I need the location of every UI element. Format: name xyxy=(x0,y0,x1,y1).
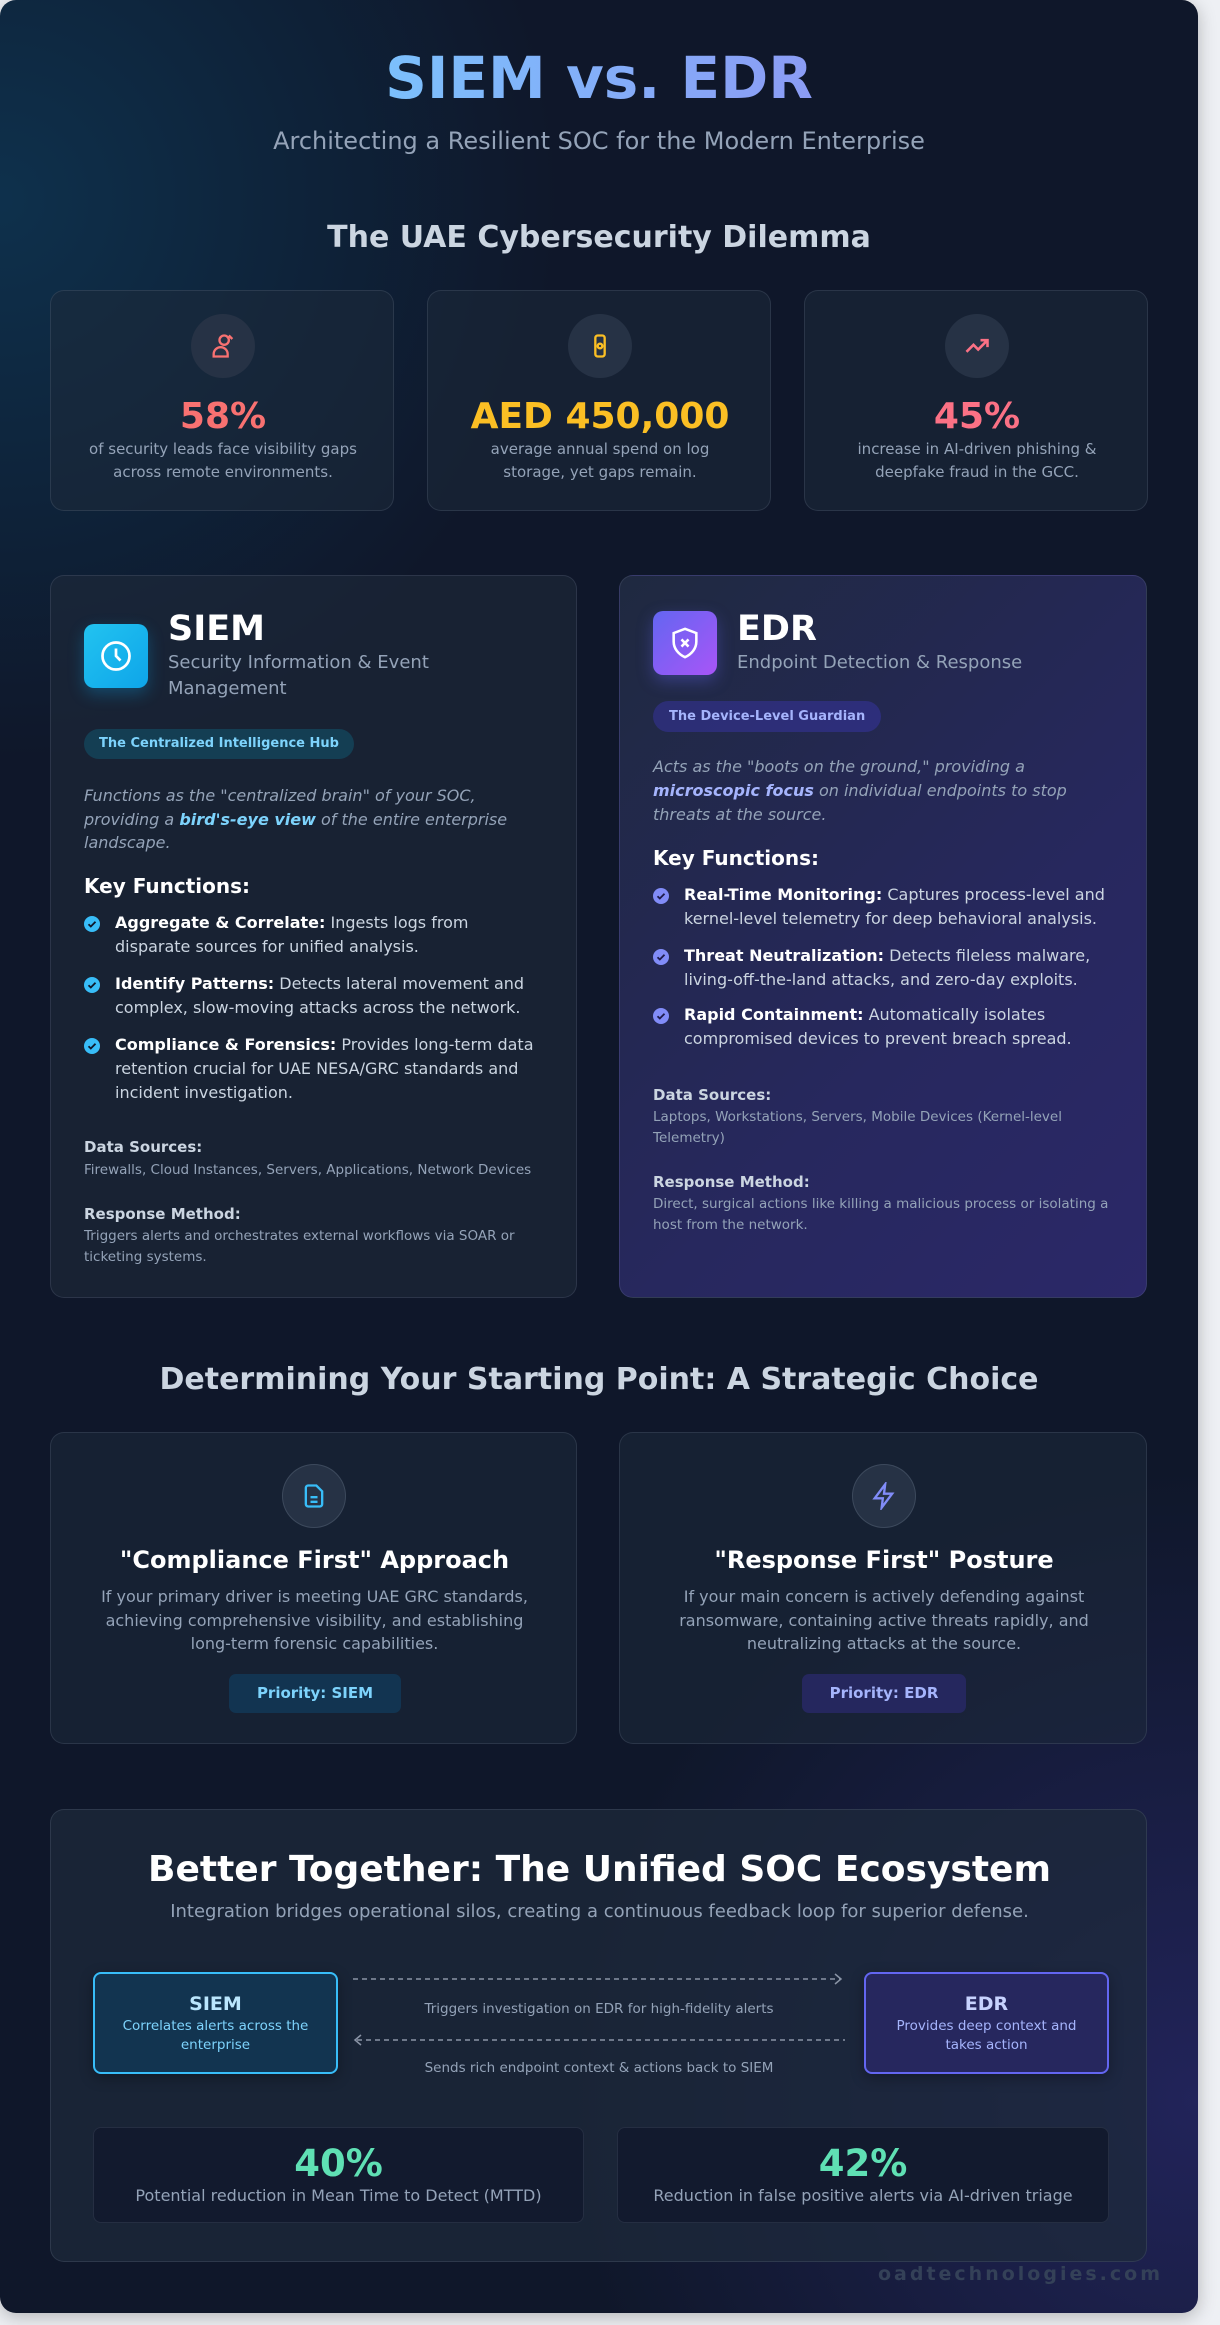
priority badge xyxy=(802,1674,966,1713)
choice text: If your main concern is actively defending against ransomware, containing active threats rapidly, and neutralizing attacks at the source. xyxy=(679,1587,1089,1653)
bullet 1: Real-Time Monitoring: Captures process-level and kernel-level telemetry for deep behavioral analysis. xyxy=(684,885,1105,928)
data sources xyxy=(652,1086,1062,1146)
metric: false positives: 42% xyxy=(819,2142,907,2185)
pill xyxy=(84,729,354,759)
choice card: compliance first xyxy=(50,1432,577,1744)
bullet 3: Compliance & Forensics: Provides long-term data retention crucial for UAE NESA/GRC standards and incident investigation. xyxy=(115,1035,534,1102)
stat card: 45% xyxy=(804,290,1148,511)
EDR subtitle: Endpoint Detection & Response xyxy=(737,652,1022,673)
data sources: Data Sources: xyxy=(84,1138,202,1156)
data sources xyxy=(84,1138,531,1178)
stat card: 58% xyxy=(50,290,394,511)
bullet 3: Rapid Containment: Automatically isolates compromised devices to prevent breach spread. xyxy=(684,1005,1072,1048)
stat number: 58% xyxy=(180,396,266,437)
data sources: Firewalls, Cloud Instances, Servers, Applications, Network Devices xyxy=(84,1162,531,1178)
stat number: 45% xyxy=(934,396,1020,437)
response method: Response Method: xyxy=(653,1173,810,1191)
panel: better together xyxy=(50,1809,1147,2262)
response method: Triggers alerts and orchestrates external workflows via SOAR or ticketing systems. xyxy=(84,1228,515,1265)
node: EDR: EDR xyxy=(965,1993,1008,2015)
node: EDR: Provides deep context and takes action xyxy=(896,2018,1076,2053)
stat text: average annual spend on log storage, yet gaps remain. xyxy=(491,440,709,481)
arrow label 2: Sends rich endpoint context & actions back to SIEM xyxy=(425,2060,773,2076)
footer watermark: oadtechnologies.com xyxy=(878,2263,1163,2285)
heading: strategic choice: Determining Your Starting Point: A Strategic Choice xyxy=(160,1362,1038,1397)
bullet 1: Aggregate & Correlate: Ingests logs from disparate sources for unified analysis. xyxy=(115,913,468,956)
stat number: AED 450,000 xyxy=(471,396,729,437)
node: EDR xyxy=(864,1972,1109,2074)
stat text: increase in AI-driven phishing & deepfake fraud in the GCC. xyxy=(858,440,1096,481)
pill: The Centralized Intelligence Hub xyxy=(99,736,339,751)
arrow: EDR to SIEM xyxy=(354,2034,845,2046)
SIEM title: SIEM xyxy=(168,609,265,649)
arrow label 1: Triggers investigation on EDR for high-fidelity alerts xyxy=(424,2001,774,2017)
icon: trend xyxy=(945,314,1009,378)
icon: bolt xyxy=(852,1464,916,1528)
data sources: Laptops, Workstations, Servers, Mobile Devices (Kernel-level Telemetry) xyxy=(653,1109,1062,1146)
arrow: SIEM to EDR xyxy=(353,1974,842,1984)
bullet 2: Threat Neutralization: Detects fileless malware, living-off-the-land attacks, and zero-day exploits. xyxy=(684,946,1090,989)
heading: dilemma: The UAE Cybersecurity Dilemma xyxy=(327,220,871,255)
icon: coins xyxy=(568,314,632,378)
EDR title: EDR xyxy=(737,609,817,649)
priority badge: Priority: EDR xyxy=(830,1684,938,1702)
response method: Response Method: xyxy=(84,1205,241,1223)
priority badge xyxy=(229,1674,401,1713)
pill xyxy=(653,701,881,732)
choice title: "Response First" Posture xyxy=(714,1546,1054,1574)
choice card: response first xyxy=(619,1432,1147,1744)
data sources: Data Sources: xyxy=(653,1086,771,1104)
stat text: of security leads face visibility gaps across remote environments. xyxy=(89,440,357,481)
choice text: If your primary driver is meeting UAE GRC standards, achieving comprehensive visibility, and establishing long-term forensic capabilities. xyxy=(101,1587,528,1653)
subtitle: Architecting a Resilient SOC for the Modern Enterprise xyxy=(273,127,925,155)
node: SIEM: SIEM xyxy=(189,1993,242,2015)
ecosystem title: Better Together: The Unified SOC Ecosystem xyxy=(148,1849,1051,1890)
metric: false positives xyxy=(617,2127,1109,2223)
title: SIEM vs. EDR xyxy=(385,44,813,112)
metric: MTTD: 40% xyxy=(294,2142,383,2185)
node: SIEM xyxy=(93,1972,338,2074)
response method xyxy=(653,1173,1108,1233)
icon: user xyxy=(191,314,255,378)
icon: document xyxy=(282,1464,346,1528)
choice title: "Compliance First" Approach xyxy=(120,1546,509,1574)
key functions heading: Key Functions: xyxy=(84,874,250,898)
description: Functions as the "centralized brain" of your SOC, providing a bird's-eye view of the entire enterprise landscape. xyxy=(84,786,507,852)
response method: Direct, surgical actions like killing a malicious process or isolating a host from the network. xyxy=(653,1196,1108,1233)
metric: false positives: Reduction in false positive alerts via AI-driven triage xyxy=(653,2186,1073,2205)
description: Acts as the "boots on the ground," providing a microscopic focus on individual endpoints to stop threats at the source. xyxy=(653,757,1067,824)
ecosystem subtitle: Integration bridges operational silos, creating a continuous feedback loop for superior defense. xyxy=(170,1901,1029,1922)
panel: SIEM xyxy=(50,575,577,1298)
priority badge: Priority: SIEM xyxy=(257,1684,373,1702)
key functions heading: Key Functions: xyxy=(653,846,819,870)
pill: The Device-Level Guardian xyxy=(669,709,865,724)
response method xyxy=(84,1205,515,1265)
icon: SIEM clock xyxy=(84,624,148,688)
stat card: AED xyxy=(427,290,771,511)
metric: MTTD: Potential reduction in Mean Time to Detect (MTTD) xyxy=(135,2186,542,2205)
metric: MTTD xyxy=(93,2127,584,2223)
panel: EDR xyxy=(619,575,1147,1298)
bullet 2: Identify Patterns: Detects lateral movement and complex, slow-moving attacks across the network. xyxy=(115,974,524,1017)
SIEM subtitle: Security Information & Event Management xyxy=(168,652,429,699)
icon: EDR shield xyxy=(653,611,717,675)
node: SIEM: Correlates alerts across the enterprise xyxy=(123,2018,308,2053)
